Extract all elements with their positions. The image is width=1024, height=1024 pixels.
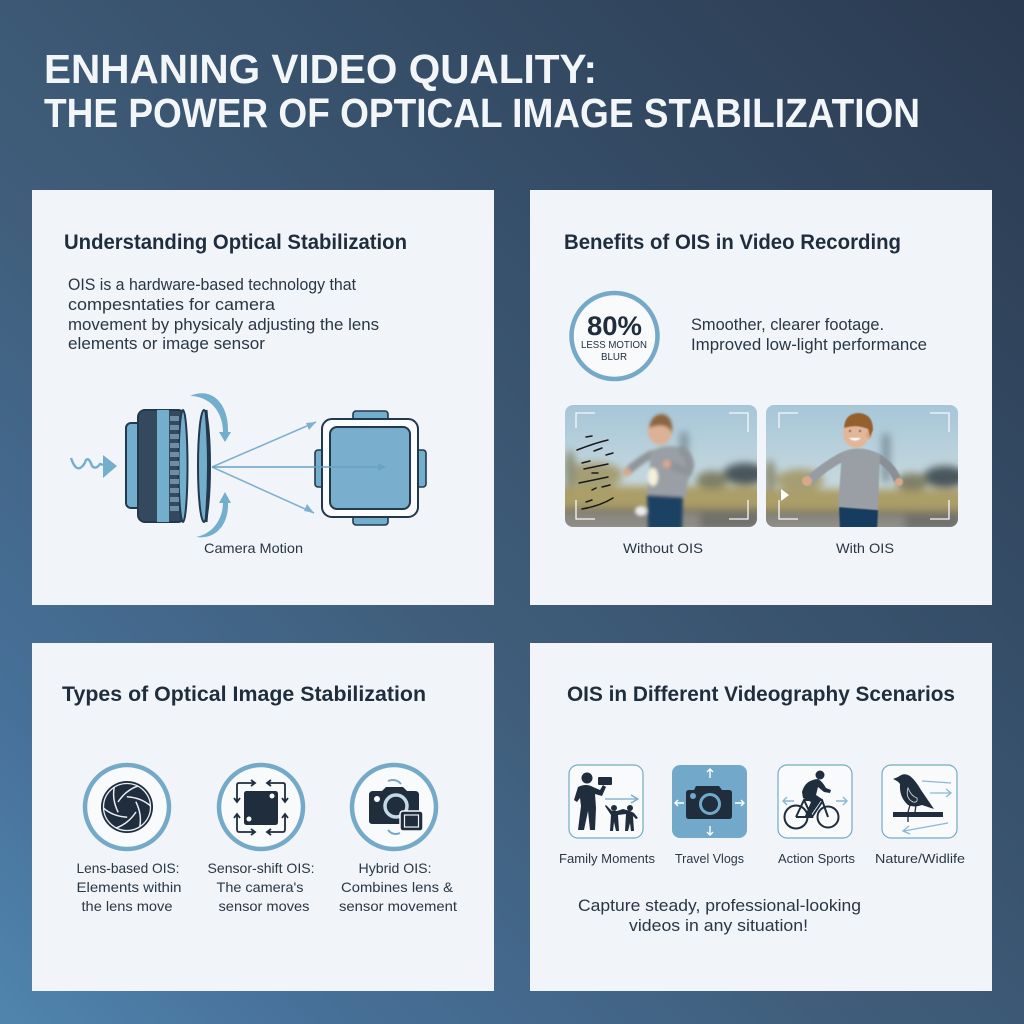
text block: hybrid: Combines lens & [341,879,454,895]
text block: closing message: Capture steady, professional-looking [578,897,861,915]
panel: benefits [530,190,992,605]
text block: hybrid: sensor movement [339,898,457,914]
label: family moments: Family Moments [559,851,655,866]
text block: sensor-shift: Sensor-shift OIS: [208,860,314,876]
text block: OIS description [68,276,379,353]
text block: hybrid [339,860,457,914]
label: travel vlogs: Travel Vlogs [675,851,744,866]
icon: travel vlogs [672,765,747,838]
text block: benefits: Improved low-light performance [691,336,927,354]
label: with OIS: With OIS [836,540,894,556]
text block: closing message: videos in any situation! [629,917,808,935]
icon: nature wildlife [882,765,957,838]
text block: benefits [691,316,927,354]
text block: lens-based [76,860,182,914]
arrow: lower motion arc [196,492,231,537]
title: ENHANING VIDEO QUALITY: [44,46,597,92]
heading: scenarios: OIS in Different Videography Scenarios [567,683,955,706]
diagram: floating lens element [198,410,210,522]
heading: benefits: Benefits of OIS in Video Recording [564,231,901,254]
text block: sensor-shift: sensor moves [218,898,310,914]
text block: OIS description: OIS is a hardware-based technology that [68,276,356,294]
label: nature wildlife: Nature/Widlife [875,851,965,866]
text block: lens-based: Elements within [76,879,182,895]
label: camera motion: Camera Motion [204,540,303,556]
icon: hybrid camera [352,765,436,849]
text block: lens-based: the lens move [82,898,173,914]
label: action sports: Action Sports [778,851,855,866]
arrows: light rays [212,422,316,513]
icon: incoming wave arrow [71,455,117,478]
text block: hybrid: Hybrid OIS: [358,860,432,876]
text block: sensor-shift: The camera's [216,879,304,895]
text block: lens-based: Lens-based OIS: [76,860,180,876]
text block: closing message [578,897,861,935]
arrow: central ray [212,463,386,471]
text block: benefits: Smoother, clearer footage. [691,316,884,334]
stat badge: 80%: 80% [587,311,642,341]
arrow: upper motion arc [190,393,231,442]
icon: lens-based aperture [85,765,169,849]
diagram: image sensor [315,411,426,525]
label: without OIS: Without OIS [623,540,703,556]
photo: with OIS [766,405,958,527]
panel: understanding optical stabilization [32,190,494,605]
text block: OIS description: movement by physicaly adjusting the lens [68,316,379,334]
title [44,46,920,136]
icon: sensor shift [219,765,303,849]
title: THE POWER OF OPTICAL IMAGE STABILIZATION [44,90,920,136]
text block: OIS description: elements or image sensor [68,335,266,353]
photo: without OIS [565,405,757,527]
panel: types of OIS [32,643,494,991]
diagram: lens barrel [126,410,188,522]
panel: scenarios [530,643,992,991]
heading: types: Types of Optical Image Stabilization [62,683,426,706]
icon: action sports [778,765,852,838]
stat badge: 80% [572,293,658,379]
stat badge: 80%: BLUR [601,352,627,363]
text block: OIS description: compesntaties for camera [68,296,276,314]
heading: understanding: Understanding Optical Stabilization [64,231,407,254]
icon: family moments [569,765,643,838]
stat badge: 80%: LESS MOTION [581,340,647,351]
text block: sensor-shift [208,860,314,914]
